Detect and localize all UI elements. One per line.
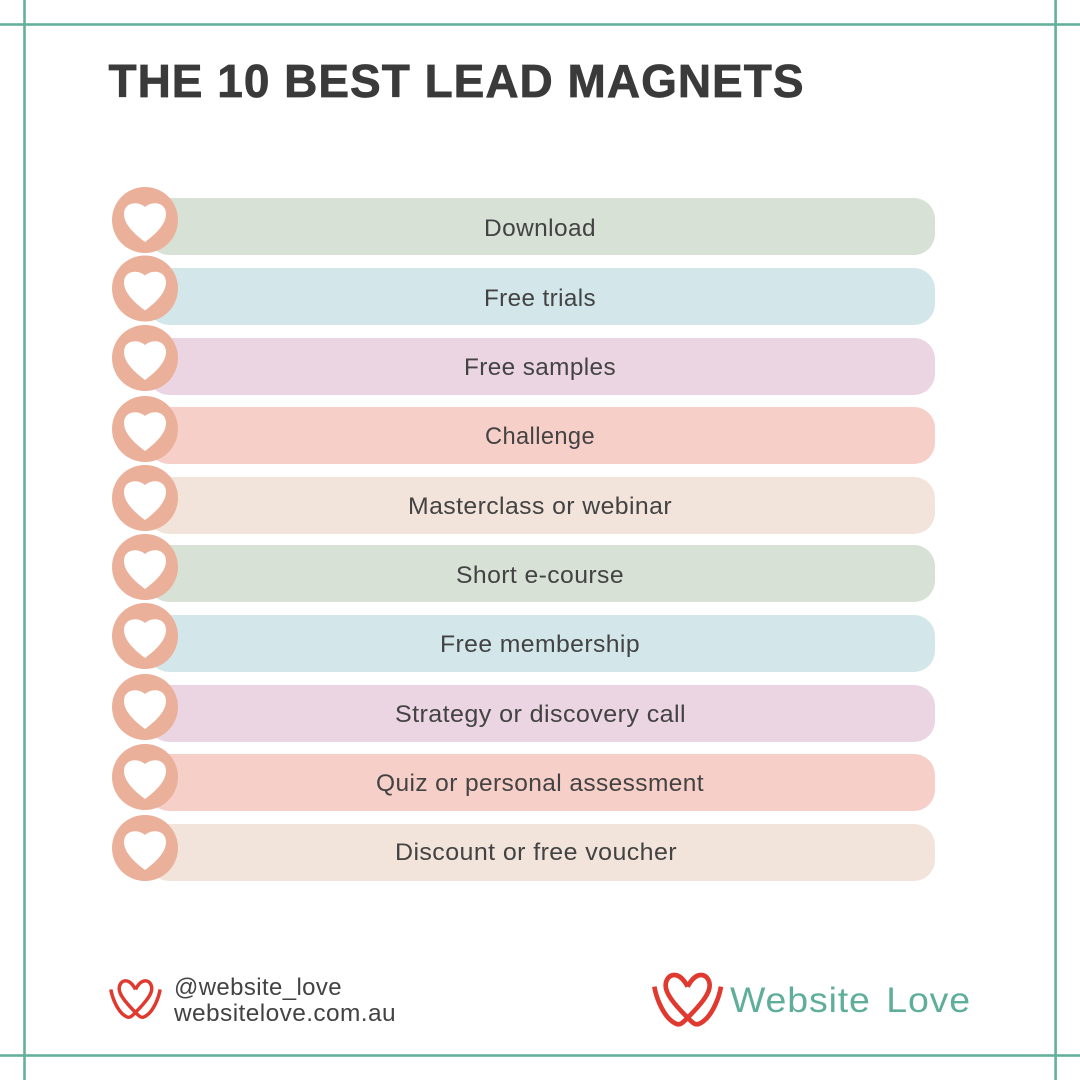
row 3: Free samples [112,325,935,395]
row 4: Challenge [112,396,935,464]
row 9: Quiz or personal assessment: Quiz or personal assessment [376,770,704,797]
row 7: Free membership: Free membership [440,631,640,658]
row 6: Short e-course: Short e-course [456,562,624,589]
social handle and website: @website_love [174,974,342,1001]
row 1: Download [112,187,935,255]
icon: large Website Love logo [654,975,721,1024]
row 7: Free membership [112,603,935,672]
row 5: Masterclass or webinar: Masterclass or webinar [408,493,672,520]
row 6: Short e-course [112,534,935,602]
row 2: Free trials [112,256,935,325]
row 2: Free trials: Free trials [484,285,596,312]
row 8: Strategy or discovery call [112,674,935,742]
row 1: Download: Download [484,215,596,242]
row 4: Challenge: Challenge [485,423,595,450]
row 10: Discount or free voucher: Discount or free voucher [395,839,677,866]
social handle and website [173,974,396,1027]
list of lead magnets [112,187,935,881]
row 8: Strategy or discovery call: Strategy or discovery call [395,701,686,728]
row 9: Quiz or personal assessment [112,744,935,811]
icon: small Website Love logo [111,981,160,1017]
row 5: Masterclass or webinar [112,465,935,534]
brand name: Website Love [730,981,971,1020]
row 10: Discount or free voucher [112,815,935,881]
title: THE 10 BEST LEAD MAGNETS [108,55,804,107]
social handle and website: websitelove.com.au [173,1000,396,1027]
row 3: Free samples: Free samples [464,354,616,381]
